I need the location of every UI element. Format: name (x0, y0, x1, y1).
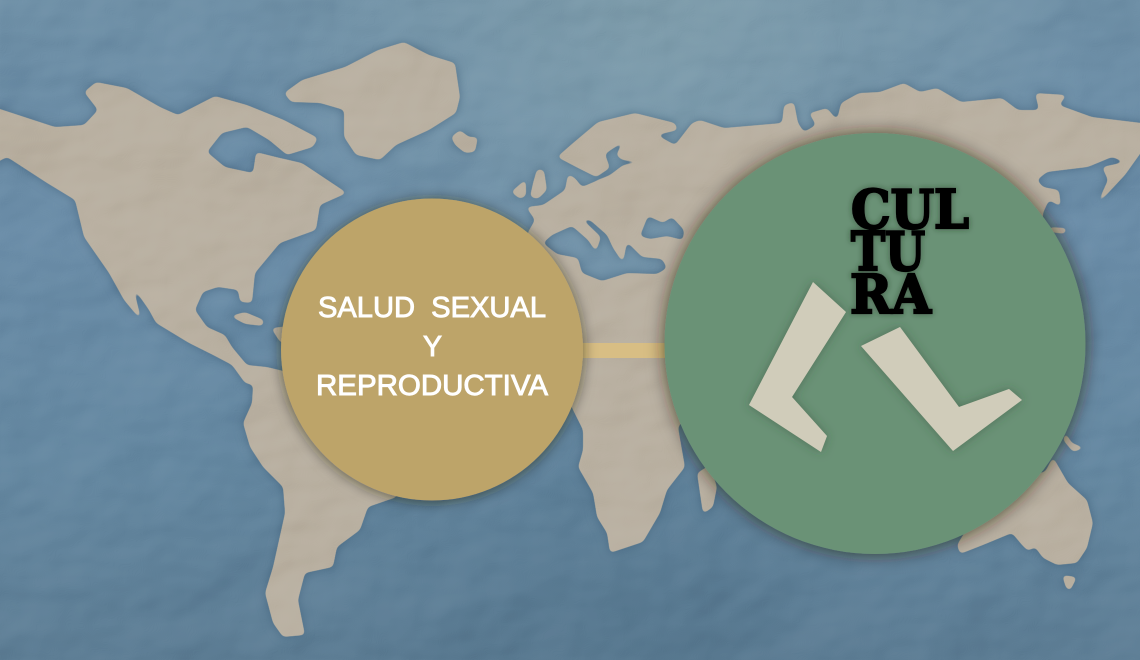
cultura wordmark: CUL (851, 179, 969, 241)
land: Iceland (451, 130, 478, 153)
land: Eurasia and Africa (525, 83, 1140, 553)
circle: salud sexual y reproductiva (281, 198, 583, 500)
land: Madagascar (697, 465, 717, 514)
land: the Americas (0, 82, 400, 637)
cultura wordmark: TU (851, 221, 925, 283)
circle label text: Y (423, 331, 442, 363)
circle label text: REPRODUCTIVA (316, 370, 548, 402)
circle label text (316, 292, 548, 402)
cultura wordmark: RA (850, 264, 932, 326)
connector bar between circles (575, 343, 675, 358)
land: Ireland (511, 179, 526, 199)
land: Cuba (230, 312, 264, 326)
cultura wordmark (850, 179, 969, 326)
circle label text: SALUD SEXUAL (318, 292, 546, 324)
circle: cultura (664, 133, 1086, 554)
land: Australia (957, 457, 1093, 565)
land: Great Britain (530, 169, 547, 199)
land: Japan (1048, 227, 1067, 234)
icon: left leg chevron (749, 282, 846, 452)
land: Hispaniola (271, 326, 290, 345)
icon: right leg chevron (861, 327, 1022, 451)
land: Greenland (284, 42, 460, 160)
land: Tasmania (1062, 575, 1077, 591)
land: New Guinea (1063, 432, 1085, 452)
